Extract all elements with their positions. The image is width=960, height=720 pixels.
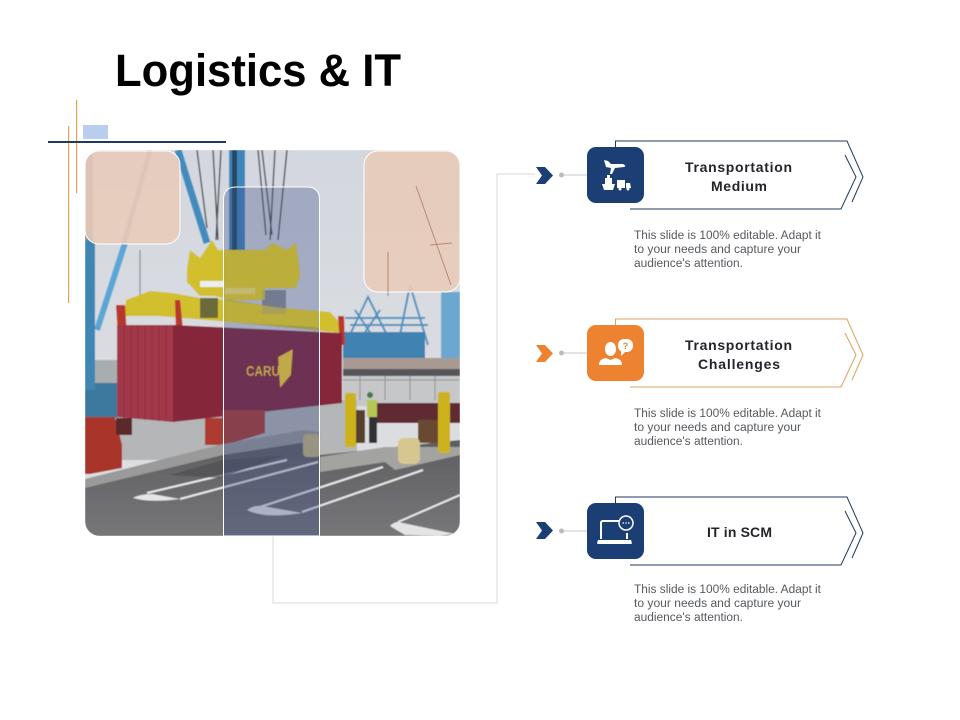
connector line from photo to rows [273,174,535,603]
photo overlay panel: left peach [85,151,180,244]
heading: Medium [711,178,767,194]
description: audience's attention. [634,258,743,270]
description: to your needs and capture your [634,244,801,256]
description: This slide is 100% editable. Adapt it [634,408,822,420]
photo panel: container crane at port [85,150,460,536]
row 3: IT in SCM [536,497,863,624]
row 1: Transportation Medium [536,141,863,270]
heading: Challenges [698,356,780,372]
arrow outline [616,141,863,209]
CARU container logo: CARU [246,363,280,380]
chevron arrow [536,167,553,184]
heading: Transportation [685,337,792,353]
icon: laptop with chat bubble [597,516,633,544]
connector dot [559,350,587,356]
description: This slide is 100% editable. Adapt it [634,584,822,596]
icon box [587,503,644,559]
row 2: Transportation Challenges [536,319,863,448]
decorative title accent lines [48,100,226,303]
icon: person with question bubble [599,339,633,365]
icon: person with question bubble: ? [623,341,628,351]
photo overlay panel: right peach [364,151,460,292]
heading: IT in SCM [707,524,772,540]
icon box [587,325,644,381]
arrow outline [616,497,863,565]
title: Logistics & IT [115,45,401,96]
chevron arrow [536,522,553,539]
icon box [587,147,644,203]
connector dot [559,528,587,534]
description [634,230,822,270]
heading: Transportation [685,159,792,175]
chevron arrow [536,345,553,362]
photo overlay panel: centre blue [224,187,330,536]
description: to your needs and capture your [634,598,801,610]
heading [685,159,792,194]
CARU container logo [246,349,293,388]
description: audience's attention. [634,436,743,448]
arrow outline [616,319,863,387]
description: This slide is 100% editable. Adapt it [634,230,822,242]
heading [685,337,792,372]
description: to your needs and capture your [634,422,801,434]
connector dot [559,172,587,178]
description [634,584,822,624]
icon: plane, ship and truck [602,160,631,190]
description: audience's attention. [634,612,743,624]
description [634,408,822,448]
